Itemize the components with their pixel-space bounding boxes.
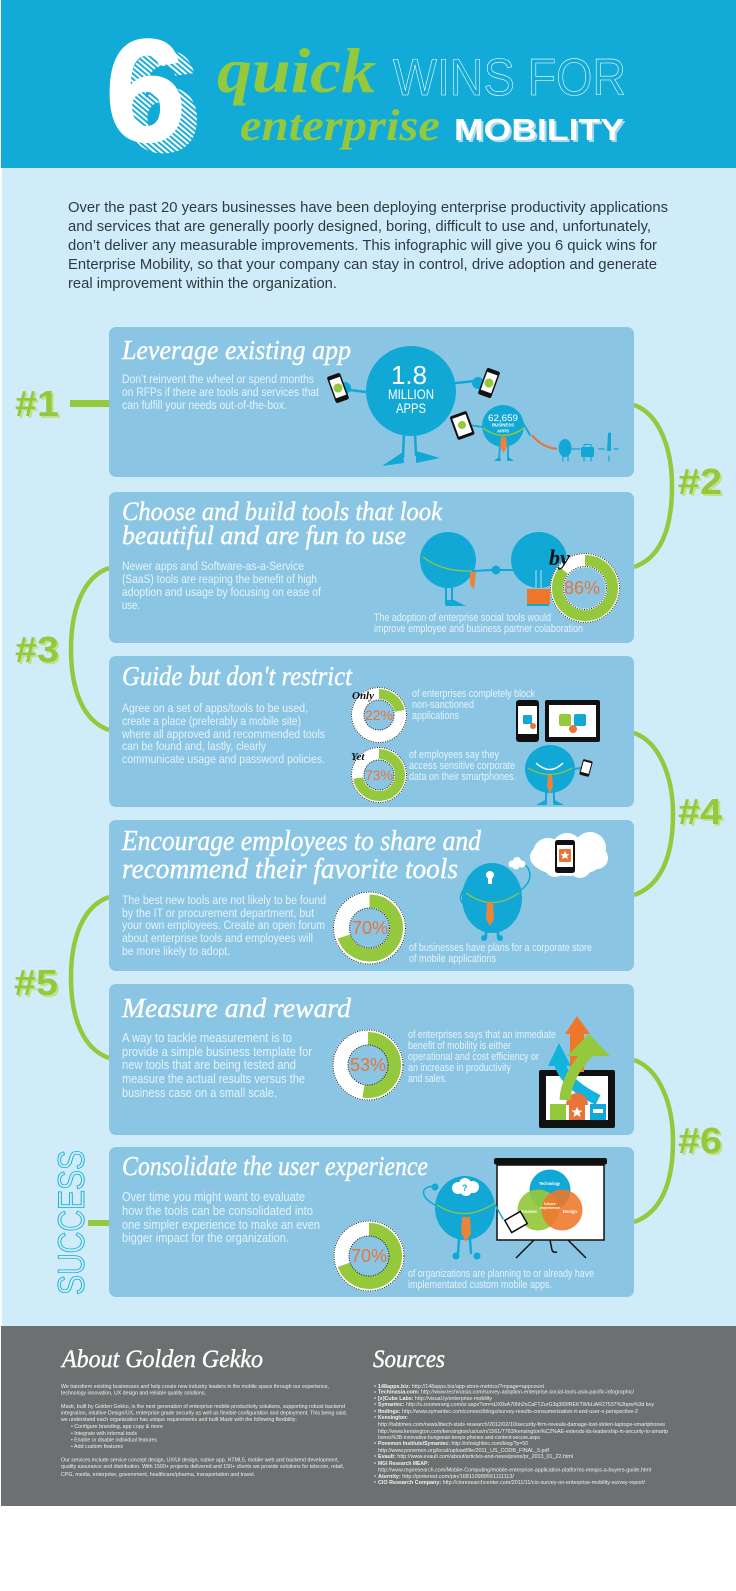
character: 62,659 business apps: APPS [497,428,509,434]
heading 2 [122,497,442,550]
intro paragraph [68,200,668,292]
heading 2: Choose and build tools that look [122,497,442,526]
stat text: 53%: an increase in productivity [408,1062,511,1074]
about text: technology innovation, UX design and reliable quality solutions. [61,1390,206,1396]
connector: success bar [88,1220,109,1226]
big numeral 6: 6 [121,20,202,183]
about text: • Integrate with internal tools [71,1431,137,1437]
heading 4: recommend their favorite tools [122,854,458,885]
panel 3: guide but don't restrict [109,656,634,807]
body 5: provide a simple business template for [122,1044,313,1059]
donut: 70%: 70% [352,918,388,938]
donut: 70% [334,1220,404,1292]
illustration: presentation board with venn diagram: Design [563,1209,577,1214]
sources list: Aternity: http://pinterest.com/pin/168110989561111113/ [378,1474,515,1480]
connector: #5 curve [71,897,109,1058]
icon: phone and tablet [516,700,600,742]
panel 2: choose and build tools [109,492,634,643]
label: #1: #1 [15,383,59,424]
body 5: A way to tackle measurement is to [122,1030,292,1045]
illustration: presentation board with venn diagram: Technology [539,1181,560,1186]
title: enterprise: enterprise [240,101,440,150]
about text: quality assurance and distribution. With 1500+ projects delivered and 150+ clients we provide solutions for telecom, retail, [61,1464,344,1470]
body 3: where all approved and recommended tools [121,727,325,741]
donut: 86%: by [549,545,570,570]
illustration: tablet with growth arrows [539,1016,615,1128]
label: #6: #6 [680,1122,724,1163]
label: #6: #6 [678,1120,722,1161]
label: #5: #5 [16,964,60,1005]
big numeral 6: 6 [105,9,186,172]
illustration: presentation board with venn diagram: User [544,1202,557,1206]
heading 1: Leverage existing app [121,335,351,365]
stat text: 22%: non-sanctioned [412,699,474,711]
illustration: cloud with phone [530,832,608,878]
stat text: 22%: applications [412,710,459,722]
success label: SUCCESS [51,1150,92,1295]
title: mobility: MOBILITY [456,114,626,149]
stat text: 73%: data on their smartphones. [409,771,516,783]
character: 1.8 million apps [327,346,500,466]
panel 6: consolidate the user experience [109,1147,634,1297]
donut: 22%: Only [352,690,374,702]
about text: Mastr, built by Golden Gekko, is the next generation of enterprise mobile productivity solutions, supporting robust backend [61,1404,345,1410]
about text: Our services include service concept design, UX/UI design, native app, HTML5, mobile web and backend development, [61,1458,339,1464]
illustration: presentation board with venn diagram: Business [521,1209,537,1214]
character: smiling employee [525,745,593,805]
body 5: business case on a small scale. [122,1085,277,1100]
sources list [374,1384,668,1486]
about text: • Add custom features [71,1444,123,1450]
body 3: Agree on a set of apps/tools to be used, [122,701,308,715]
stat text: 53%: of enterprises says that an immediate [408,1029,556,1041]
sources list: Symantec: http://s.zoomerang.com/sr.aspx?sm=dJX8sA70hh2sCaFTZurG3q365fREKTWbLiAR27537%2bpw%3d key [378,1402,654,1408]
panel 5: measure and reward [109,984,634,1135]
body 1: on RFPs if there are tools and services that [122,385,319,399]
caption 4: of businesses have plans for a corporate store [409,942,592,954]
connector: #6 curve [634,1060,673,1222]
sources list: 148apps.biz: http://148apps.biz/app-store-metrics/?mpage=appcount [378,1384,544,1390]
stat text: 22%: of enterprises completely block [412,688,535,700]
caption 2: improve employee and business partner colaboration [374,623,583,635]
intro paragraph: Enterprise Mobility, so that your company can stay in control, drive adoption and generate [68,257,657,273]
body 2: use. [122,598,140,612]
body 5: measure the actual results versus the [122,1071,305,1086]
sources list: CIO Research Company: http://cioresearchcenter.com/2011/11/cio-survey-on-enterprise-mobility-survey-report/ [378,1480,645,1486]
body 4: your own employees. Create an open forum [122,918,325,932]
about text: integration, intuitive Design/UX, enterprise grade security as well as flexible configuration and deployment. This being said, [61,1410,347,1416]
donut: 73% [351,747,407,803]
body 6: bigger impact for the organization. [122,1230,289,1245]
intro paragraph: Over the past 20 years businesses have been deploying enterprise productivity applications [68,200,668,216]
illustration: presentation board with venn diagram: experience [540,1206,560,1210]
caption 4: of mobile applications [409,953,496,965]
caption 6: implementated custom mobile apps. [408,1279,552,1291]
stat text: 73% [409,749,516,783]
heading 6: Consolidate the user experience [122,1151,428,1181]
character: 1.8 million apps: MILLION [388,387,434,402]
title: wins for: WINS FOR [393,49,626,107]
body 5 [122,1030,313,1100]
caption 6: of organizations are planning to or already have [408,1268,594,1280]
body 2 [122,559,321,612]
footer [1,1326,736,1506]
illustration: presentation board with venn diagram [494,1158,607,1258]
character: presenter with question: ? [462,1183,468,1193]
sources list: http://www.mgiresearch.com/Mobile-Computing/mobile-enterprise-application-platforms-meaps-a-buyers-guide.html [378,1468,651,1474]
label: #4: #4 [680,793,724,834]
body 6 [122,1189,320,1245]
donut: 86%: 86% [564,578,600,598]
intro paragraph: don’t deliver any measurable improvements. This infographic will give you 6 quick wins for [68,238,657,254]
donut: 22%: 22% [365,707,393,723]
title: quick: quick [217,35,376,106]
donut: 73%: 73% [365,767,393,783]
caption 4 [409,942,592,965]
label: #1: #1 [17,385,61,426]
sources list: MGI Research MEAP: [378,1461,429,1467]
label: #4: #4 [678,791,722,832]
character: 62,659 business apps: BUSINESS [492,422,514,428]
body 3: can be found and, lastly, clearly [122,739,267,753]
sources list: Ponemon Institute/Symantec: http://infosightinc.com/blog/?p=50 [378,1441,528,1447]
character: 62,659 business apps: 62,659 [488,413,518,424]
body 6: how the tools can be consolidated into [122,1203,313,1218]
label: #3: #3 [17,631,61,672]
body 2: adoption and usage by focusing on ease of [122,585,321,599]
stat text: 73%: of employees say they [409,749,499,761]
about text: • Configure branding, app copy & more [71,1424,163,1430]
donut: 86% [549,545,620,623]
body 4: about enterprise tools and employees will [122,931,313,945]
about text: • Enable or disable individual features [71,1438,157,1444]
donut: 53%: 53% [350,1055,386,1075]
about text: CPG, media, enterprise, government, healthcare/pharma, transportation and travel. [61,1472,255,1478]
sources list: Evault: http://www.evault.com/about/articles-and-news/press/pr_2013_01_22.html [378,1454,573,1460]
sources list: [x]Cube Labs: http://visual.ly/enterprise-mobility [378,1396,492,1402]
label: #5: #5 [14,962,58,1003]
body 1: can fulfill your needs out-of-the-box. [122,398,287,412]
character: 1.8 million apps: 1.8 [391,360,427,390]
body 4: by the IT or procurement department, but [122,906,314,920]
heading 5: Measure and reward [121,993,352,1023]
sources list: http://www.ponemon.org/local/upload/file/2011_US_CODB_FINAL_5.pdf [378,1448,549,1454]
label: #2: #2 [678,461,722,502]
heading 3: Guide but don't restrict [122,661,353,691]
character: presenter with question [424,1176,527,1260]
title: mobility: MOBILITY [454,112,624,147]
body 1 [122,372,319,412]
donut: 53% [332,1030,404,1100]
header band [1,0,736,183]
stat text: 22% [412,688,535,722]
about text [60,1384,347,1478]
heading 4 [121,826,482,885]
heading 4: Encourage employees to share and [121,826,482,857]
label: #3: #3 [15,629,59,670]
about text: we understand each organization has unique requirements and built Mastr with the following flexibility: [60,1417,297,1423]
body 3: create a place (preferably a mobile site) [122,714,301,728]
heading 2: beautiful and are fun to use [122,521,406,550]
body 4: be more likely to adopt. [122,944,230,958]
stat text: 53%: operational and cost efficiency or [408,1051,539,1063]
body 6: one simpler experience to make an even [122,1217,320,1232]
intro paragraph: real improvement within the organization. [68,276,337,292]
body 4: The best new tools are not likely to be found [122,893,326,907]
body 5: new tools that are being tested and [122,1057,296,1072]
panel 1: leverage existing app [109,327,634,477]
caption 6 [408,1268,594,1291]
sources list: Techinasia.com: http://www.techinasia.com/survey-adoption-enterprise-social-tools-asia-pacific-infographic/ [378,1390,634,1396]
stat text: 53% [408,1029,556,1085]
sources heading: Sources [373,1346,445,1373]
sources list: http://tabtimes.com/news/ittech-stats-research/2012/02/10/security-firm-reveals-damage-lost-stolen-laptops-smartphones [378,1422,665,1428]
connector: #4 curve [634,733,673,895]
donut: 73%: Yet [351,751,365,763]
character: thinking employee [460,857,530,941]
caption 2: The adoption of enterprise social tools would [374,612,551,624]
body 6: Over time you might want to evaluate [122,1189,305,1204]
stat text: 53%: benefit of mobility is either [408,1040,511,1052]
sources list: findings: http://www.symantec.com/connect/blogs/survey-results-consumerization-it-and-user-s-perspective-2 [378,1409,638,1415]
body 2: (SaaS) tools are reaping the benefit of high [122,572,317,586]
character: 1.8 million apps: APPS [396,401,426,416]
body 4 [122,893,326,958]
about heading: About Golden Gekko [60,1346,263,1373]
sources list: http://www.kensington.com/kensington/us/us/n/1561/7763/kensington%C2%AE-extends-its-leadership-in-security-to-smartp [378,1429,668,1435]
connector: #3 curve [71,568,109,730]
sources list: Kensington: [378,1415,408,1421]
connector: #2 curve [634,405,672,567]
donut: 22% [351,687,407,743]
orange cord and small devices [532,432,618,461]
body 3: communicate usage and password policies. [122,752,325,766]
stat text: 73%: access sensitive corporate [409,760,515,772]
about text: We transform existing businesses and help create new industry leaders in the mobile space through our experience, [61,1384,329,1390]
body 1: Don’t reinvent the wheel or spend months [122,372,314,386]
stat text: 53%: and sales. [408,1073,447,1085]
sources list: hones%3B-innovative-bungeeair-keeps-phones-and-content-secure.aspx [378,1435,540,1441]
body 2: Newer apps and Software-as-a-Service [122,559,304,573]
connector: #1 bar [70,400,109,407]
donut: 70%: 70% [351,1246,387,1266]
intro paragraph: and services that are generally poorly designed, boring, difficult to use and, unfortunately, [68,219,651,235]
caption 2 [374,612,583,635]
illustration: handshake [420,532,567,606]
body 3 [121,701,325,766]
donut: 70% [333,892,406,964]
character: 62,659 business apps [449,405,530,461]
label: #2: #2 [680,463,724,504]
panel 4: encourage employees [109,820,634,971]
